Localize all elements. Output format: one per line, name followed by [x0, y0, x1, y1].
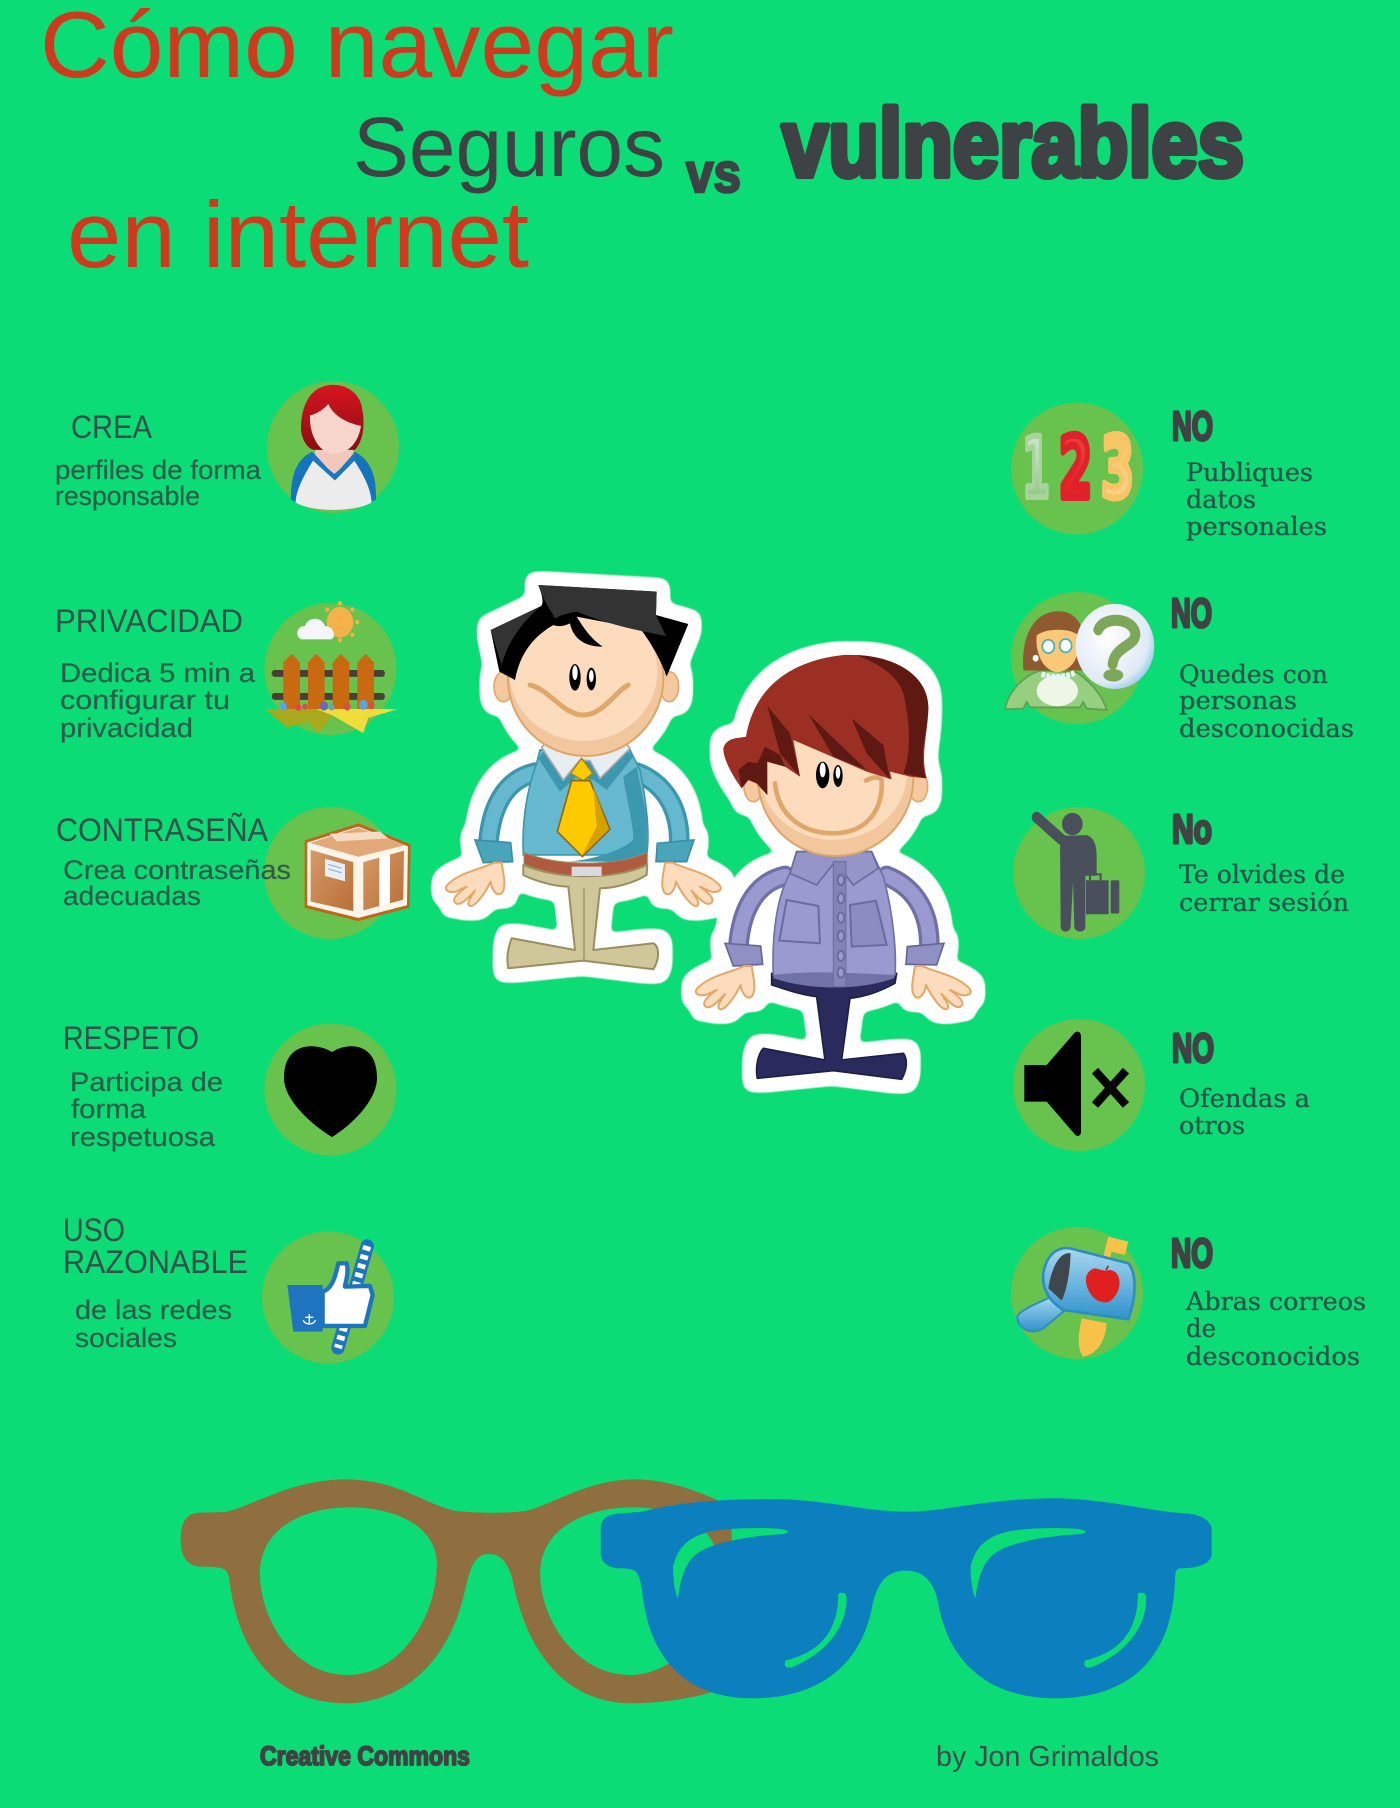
icon: thumbs up with rope [287, 1246, 373, 1348]
icon circle [264, 603, 396, 735]
body text: datos [1186, 485, 1256, 514]
head [744, 772, 763, 802]
hair [491, 585, 688, 680]
body text: Crea contraseñas [63, 855, 291, 885]
body text: Abras correos [1185, 1287, 1366, 1316]
body text [1185, 1287, 1366, 1371]
body text [70, 1067, 223, 1152]
heading: PRIVACIDAD [55, 603, 243, 639]
body text: Ofendas a [1179, 1084, 1310, 1113]
body text [1186, 458, 1327, 541]
heading: RAZONABLE [63, 1244, 248, 1280]
panel: right item datos personales [1011, 402, 1327, 541]
panel: right item correos [1011, 1227, 1366, 1371]
body text: Publiques [1186, 458, 1313, 487]
body text [63, 855, 291, 911]
eyes [569, 664, 581, 691]
panel: left item RESPETO [63, 1020, 396, 1156]
body text: otros [1179, 1111, 1245, 1140]
icon: person leaving with briefcase [1037, 813, 1119, 932]
heading: USO [63, 1212, 125, 1248]
body text: responsable [55, 481, 200, 511]
icon: numbers 123: 1 [1022, 419, 1050, 517]
title word: vulnerables: vulnerables [782, 90, 1244, 197]
body text: desconocidas [1179, 714, 1354, 743]
character: man with tie [446, 585, 721, 969]
body text: de las redes [75, 1295, 232, 1325]
panel: left item PRIVACIDAD [55, 601, 398, 743]
arms [738, 876, 929, 947]
body text: de [1186, 1314, 1216, 1343]
trousers [757, 973, 906, 1079]
icon circle [1011, 592, 1143, 724]
hands [696, 966, 971, 1009]
hair [723, 655, 928, 795]
panel: right item cerrar sesión [1013, 806, 1349, 939]
panel: right item ofendas [1013, 1019, 1310, 1151]
body text: personas [1179, 686, 1297, 715]
icon: black heart [284, 1046, 377, 1137]
icon circle [1013, 1019, 1145, 1151]
body text: Quedes con [1179, 660, 1328, 689]
belt and trousers [507, 865, 658, 969]
icon circle [262, 1232, 394, 1364]
smile [775, 777, 882, 833]
body text [75, 1295, 232, 1353]
icon circle [1011, 402, 1143, 534]
footer: Creative Commons: Creative Commons [260, 1741, 470, 1771]
icon circle [264, 807, 396, 939]
body text: privacidad [60, 713, 193, 743]
icon: woman with red hair [291, 385, 376, 510]
heading: NO [1171, 1230, 1213, 1276]
icon: woman with question bubble [1005, 604, 1154, 710]
heading: RESPETO [63, 1020, 199, 1056]
icon: numbers 123: 2 [1059, 419, 1092, 517]
footer: author: by Jon Grimaldos [936, 1741, 1159, 1773]
panel: left item USO RAZONABLE [63, 1212, 394, 1364]
eyes [816, 762, 829, 788]
body text: personales [1186, 512, 1327, 541]
body text [1179, 660, 1354, 743]
heading: NO [1171, 590, 1212, 636]
heading: CREA [71, 409, 153, 445]
icon: cardboard box [306, 825, 409, 920]
torso and collar [523, 750, 648, 855]
body text: adecuadas [63, 881, 201, 911]
title word: Seguros: Seguros [353, 100, 665, 194]
icon: mailbox with apple [1017, 1237, 1135, 1357]
hands [446, 863, 721, 906]
heading [63, 1212, 248, 1280]
body text [60, 658, 256, 743]
arms [488, 773, 679, 843]
shirt [773, 852, 895, 986]
heading: NO [1172, 1025, 1214, 1071]
panel: right item personas desconocidas [1005, 590, 1354, 743]
icon: brown glasses [181, 1479, 732, 1703]
body text: sociales [75, 1323, 177, 1353]
body text: cerrar sesión [1179, 888, 1349, 917]
heading: CONTRASEÑA [56, 812, 269, 848]
body text: Dedica 5 min a [60, 658, 256, 688]
body text: desconocidos [1186, 1342, 1360, 1371]
body text: forma [71, 1094, 147, 1124]
icon circle [267, 381, 399, 513]
title line: en internet: en internet [67, 182, 529, 287]
body text [55, 455, 262, 511]
heading: No [1172, 806, 1212, 852]
panel: left item CONTRASEÑA [56, 807, 409, 939]
body text: respetuosa [70, 1122, 216, 1152]
icon circle [264, 1024, 396, 1156]
character: man with shirt [696, 655, 971, 1079]
icon: numbers 123 [1022, 419, 1134, 517]
icon: numbers 123: 3 [1101, 419, 1134, 517]
body text: Participa de [70, 1067, 223, 1097]
body text: perfiles de forma [55, 455, 262, 485]
smile [530, 685, 628, 715]
head [494, 672, 513, 702]
title word: vs: vs [686, 141, 741, 204]
icon circle [1013, 807, 1145, 939]
icon: muted speaker [1024, 1032, 1126, 1136]
heading: NO [1172, 403, 1213, 449]
icon: blue sunglasses [601, 1498, 1212, 1698]
body text: configurar tu [60, 685, 230, 715]
tie [571, 758, 593, 781]
panel: left item CREA [55, 381, 399, 513]
icon circle [1011, 1227, 1143, 1359]
body text: Te olvides de [1179, 860, 1345, 889]
body text [1179, 1084, 1310, 1140]
icon: fence with sun and cloud [265, 601, 398, 733]
body text [1179, 860, 1349, 917]
